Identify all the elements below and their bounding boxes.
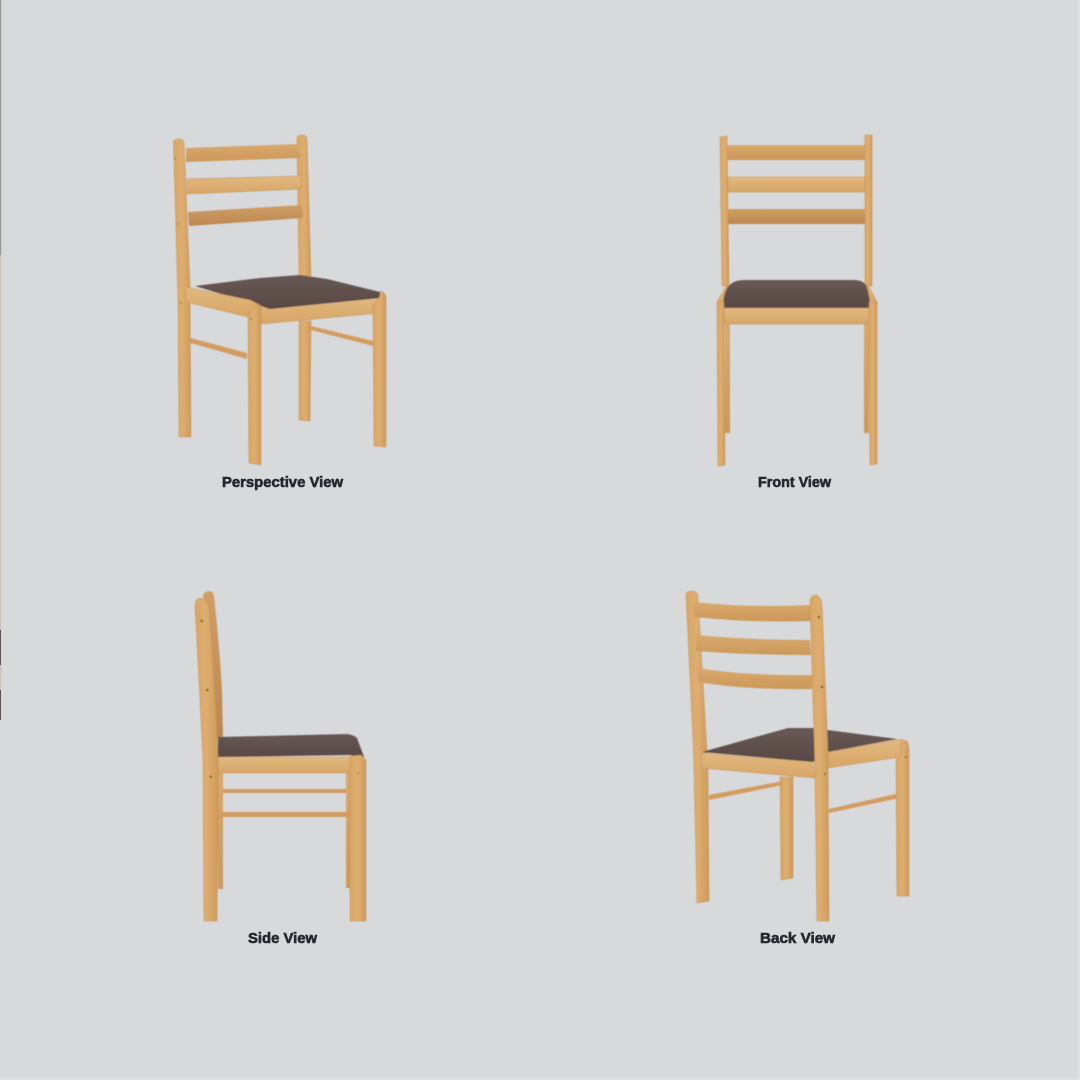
left edge sliver [0, 0, 2, 720]
rungs [709, 781, 783, 800]
chair: front view [717, 135, 877, 466]
screws [818, 616, 907, 775]
left apron [186, 287, 261, 317]
back slats [186, 144, 303, 226]
right front leg [373, 291, 386, 447]
left apron [702, 753, 815, 778]
label: side view: Side View [248, 931, 318, 947]
back slats [727, 145, 865, 224]
front legs [717, 302, 877, 466]
near back post and leg [195, 598, 218, 921]
front leg [248, 304, 261, 465]
right apron [258, 295, 380, 324]
seat pad [195, 275, 380, 309]
rungs [219, 789, 350, 817]
seat chamfers [717, 285, 729, 303]
apron [724, 308, 870, 324]
back slats [693, 602, 812, 689]
rear inner leg [780, 777, 793, 880]
apron [218, 757, 350, 773]
right leg [896, 740, 909, 896]
label: perspective view: Perspective View [222, 475, 344, 491]
chair: back view [686, 591, 909, 921]
near post and leg [810, 595, 829, 921]
seat pad [723, 280, 870, 308]
seat pad [218, 734, 364, 757]
chair: side view [195, 591, 366, 921]
screws [174, 158, 252, 320]
chair: perspective view [174, 135, 386, 465]
label: back view: Back View [760, 931, 836, 947]
far legs [218, 773, 350, 889]
seat pad [702, 728, 897, 762]
back posts [720, 135, 872, 286]
rear legs [725, 324, 869, 433]
far back post [203, 591, 223, 738]
rungs [187, 337, 247, 359]
rear right leg [299, 321, 311, 421]
screws [200, 619, 359, 778]
back post right [297, 135, 311, 276]
right apron [828, 739, 902, 768]
back post left [174, 139, 191, 437]
front leg [350, 755, 366, 921]
left post and leg [686, 591, 709, 903]
label: front view: Front View [758, 475, 832, 491]
